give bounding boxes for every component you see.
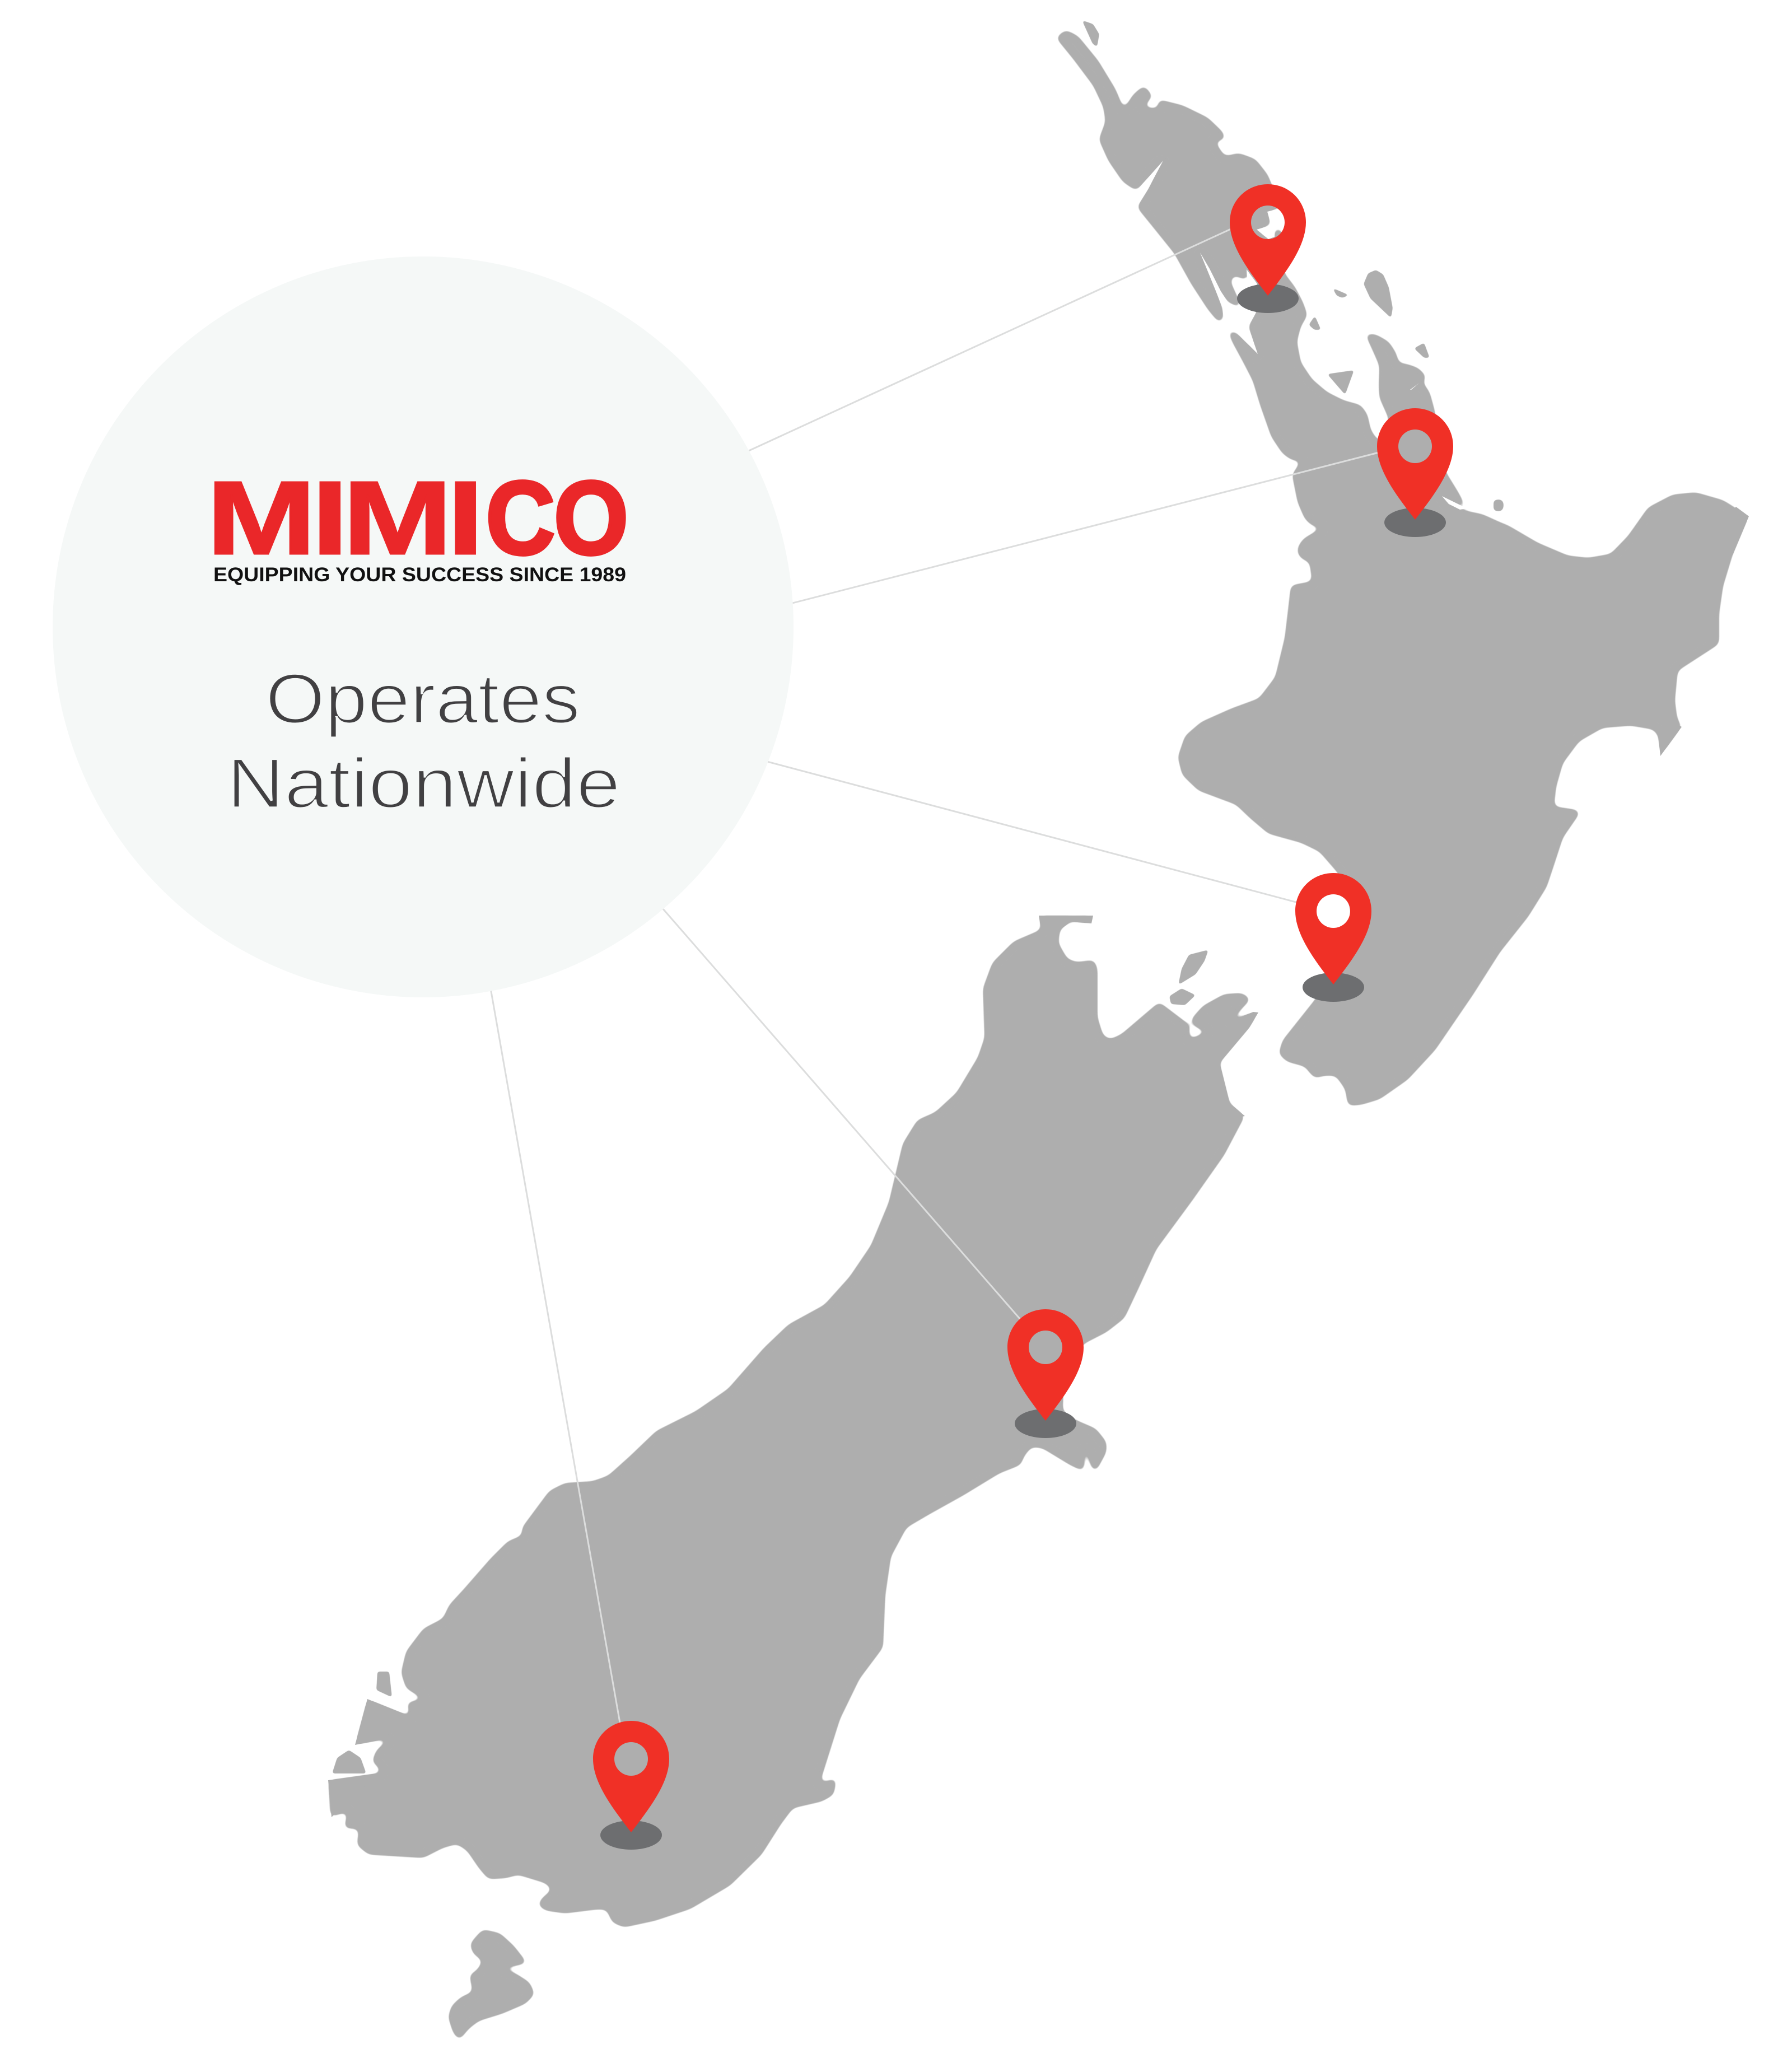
sharp land details	[328, 507, 1749, 1817]
heading line 2: Nationwide	[227, 744, 620, 823]
heading: Operates Nationwide	[227, 659, 620, 823]
offshore islands	[332, 20, 1504, 1773]
pin: Northland	[1230, 184, 1306, 313]
sharp inlets in the coastline	[1126, 161, 1467, 510]
connector to Christchurch pin	[644, 887, 1020, 1319]
logo tagline: EQUIPPING YOUR SUCCESS SINCE 1989	[213, 564, 626, 586]
connector lines	[482, 228, 1379, 1726]
pin: Wellington	[1295, 873, 1371, 1002]
pin: Queenstown	[593, 1721, 669, 1850]
connector to Auckland pin	[773, 452, 1379, 608]
heading line 1: Operates	[265, 659, 580, 738]
connector to Northland pin	[728, 228, 1232, 460]
Stewart Island	[448, 1929, 535, 2041]
North Island	[1056, 30, 1749, 1106]
pin: Christchurch	[1007, 1309, 1084, 1438]
map of New Zealand	[328, 20, 1749, 2041]
circle background	[53, 256, 794, 997]
logo: MIMICO	[207, 459, 628, 586]
wordmark letters MIMI: MIMI	[207, 459, 484, 576]
location pins	[593, 184, 1453, 1850]
circle panel	[53, 256, 794, 997]
logo wordmark	[207, 459, 628, 576]
main islands with smoothed coastline	[328, 30, 1749, 2041]
connector to Wellington pin	[750, 757, 1298, 903]
pin: Auckland	[1377, 408, 1453, 537]
connector to Queenstown pin	[482, 937, 620, 1726]
South Island	[328, 916, 1258, 1927]
wordmark letters CO: CO	[486, 459, 628, 576]
